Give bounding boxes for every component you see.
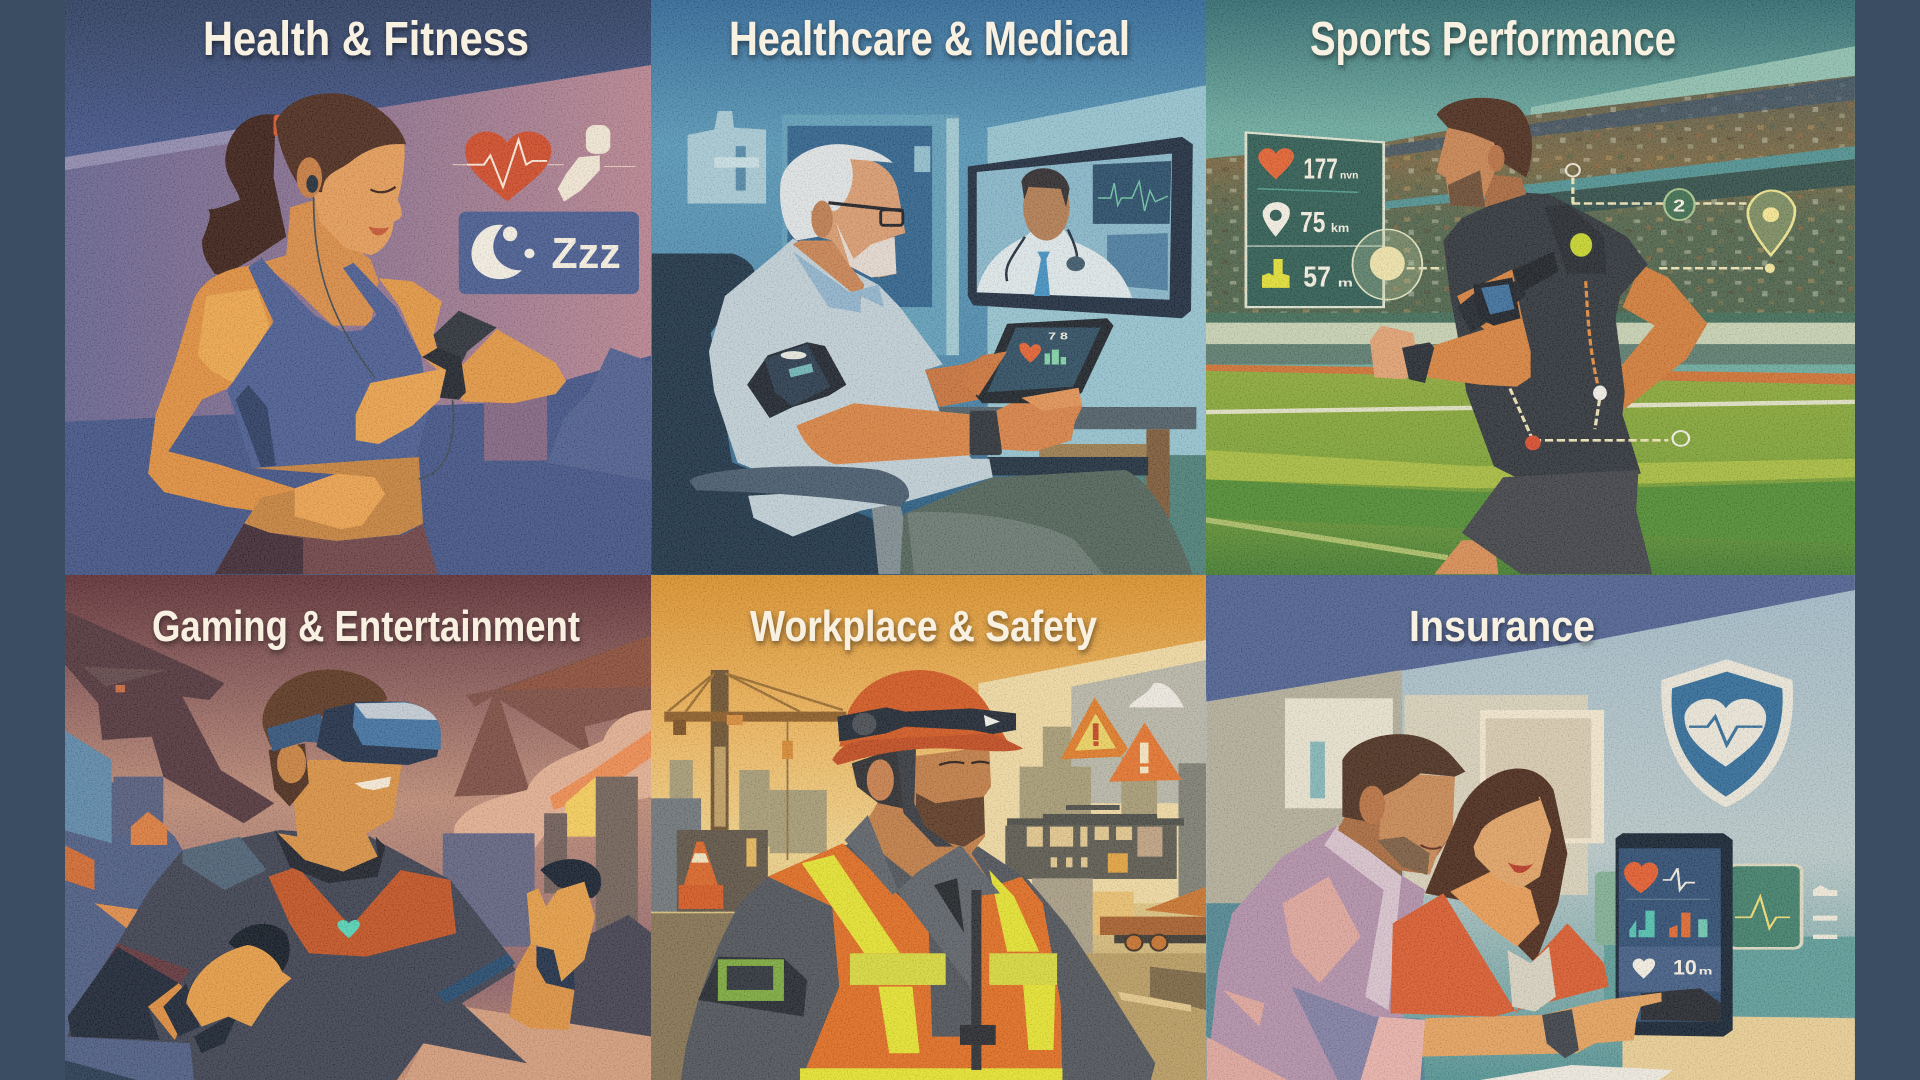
tablet: 7 8	[1048, 332, 1068, 343]
smartphone	[1616, 833, 1733, 1037]
doctor on screen	[977, 168, 1132, 298]
title: workplace and safety: Workplace & Safety	[750, 602, 1097, 651]
door	[782, 115, 959, 355]
building	[1005, 805, 1184, 953]
stats card: 177	[1303, 153, 1338, 185]
stats card: 57	[1303, 261, 1331, 293]
sleep panel	[459, 212, 639, 294]
fence	[1200, 313, 1857, 364]
pendant heart	[337, 920, 360, 938]
smartphone: m	[1699, 965, 1712, 977]
tracking markers	[1525, 164, 1795, 450]
stadium crowd	[1200, 76, 1855, 322]
stats card	[1246, 132, 1384, 307]
stats card: nvn	[1340, 169, 1358, 181]
wall monitor	[968, 137, 1193, 318]
right controller and hand	[510, 859, 601, 1030]
tracking markers: 2	[1673, 197, 1685, 216]
vitals card	[1595, 865, 1837, 948]
hard hat	[832, 670, 1023, 765]
sleep panel: Zzz	[551, 229, 621, 278]
desk paper	[1480, 1065, 1673, 1080]
worker	[680, 670, 1155, 1080]
city right	[64, 777, 652, 1080]
chair	[652, 253, 916, 574]
icon: shield with heart	[1661, 659, 1793, 807]
gamer	[68, 670, 601, 1080]
stats card: m	[1338, 277, 1353, 289]
warning signs	[1061, 697, 1182, 782]
stats card: 75	[1300, 206, 1325, 238]
panel: health and fitness	[63, 0, 652, 577]
title: gaming and entertainment: Gaming & Entertainment	[152, 602, 580, 651]
pitch	[1200, 364, 1855, 577]
tracking dashed lines	[1407, 178, 1769, 440]
elderly patient	[689, 144, 1082, 536]
panel: insurance	[1200, 570, 1857, 1080]
icon: traffic cone	[679, 842, 723, 909]
site shed	[677, 830, 768, 912]
VR headset	[267, 702, 441, 765]
clouds and glow	[454, 710, 652, 870]
dragon right	[454, 635, 652, 873]
woman	[148, 93, 566, 574]
skyline	[651, 727, 1206, 912]
left controller and hand	[148, 924, 292, 1053]
icon: medical cabinet	[687, 111, 766, 204]
crane	[664, 670, 846, 860]
runner	[1370, 98, 1707, 574]
city left	[64, 730, 251, 1080]
woman	[1391, 769, 1609, 1017]
dump truck	[1100, 887, 1207, 951]
panel: gaming and entertainment	[60, 570, 657, 1080]
dragon left	[64, 610, 274, 823]
ground	[651, 913, 1207, 1080]
icon: activity	[558, 125, 636, 202]
title: healthcare and medical: Healthcare & Medical	[729, 13, 1130, 66]
trousers	[900, 470, 1193, 574]
office wall	[1206, 670, 1855, 1080]
title: sports performance: Sports Performance	[1310, 13, 1676, 66]
icon: heart with pulse	[452, 131, 564, 202]
panel: workplace and safety	[650, 570, 1207, 1080]
stats card: km	[1331, 221, 1349, 235]
hand and smartwatch	[1542, 993, 1661, 1058]
smartphone: 10	[1673, 956, 1697, 979]
table	[939, 407, 1196, 518]
panel: sports performance	[1200, 0, 1857, 577]
title: health and fitness: Health & Fitness	[203, 13, 529, 66]
tablet	[961, 318, 1114, 411]
wall with light	[64, 65, 652, 422]
target reticle	[1352, 229, 1422, 300]
title: insurance: Insurance	[1409, 602, 1595, 651]
panel: healthcare and medical	[650, 0, 1207, 577]
man	[1206, 734, 1661, 1080]
